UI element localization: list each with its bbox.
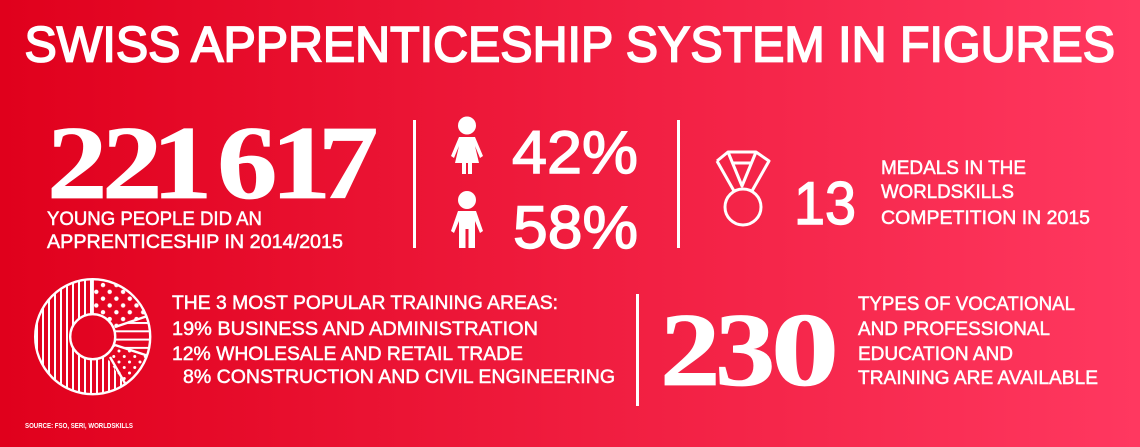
stat: types of education: TRAINING ARE AVAILABLE [858, 367, 1098, 389]
education caption: TYPES OF VOCATIONAL [858, 293, 1075, 315]
donut chart: training areas [34, 278, 152, 396]
medal count: 13 [794, 170, 856, 237]
stat: types of education: AND PROFESSIONAL [858, 318, 1050, 340]
icon: male [451, 191, 483, 248]
stat: medals: WORLDSKILLS [881, 181, 1014, 203]
stat: medals: COMPETITION IN 2015 [881, 207, 1090, 229]
title: SWISS APPRENTICESHIP SYSTEM IN FIGURES [24, 16, 1115, 72]
source note: SOURCE: FSO, SERI, WORLDSKILLS [25, 423, 133, 430]
big number 230: 0 [771, 292, 839, 408]
female percent: 42% [512, 119, 638, 186]
stat: medals [717, 152, 1090, 237]
apprentices caption: YOUNG PEOPLE DID AN [47, 208, 262, 230]
stat: types of education [660, 292, 1098, 408]
stat: types of education: EDUCATION AND [858, 343, 1013, 365]
training areas text: 8% CONSTRUCTION AND CIVIL ENGINEERING [183, 366, 615, 388]
stat: gender split [451, 116, 638, 261]
icon: medal [717, 152, 769, 225]
training areas text: THE 3 MOST POPULAR TRAINING AREAS: [172, 292, 558, 314]
training areas text: 12% WHOLESALE AND RETAIL TRADE [172, 343, 523, 365]
big number 221 617: 221617 [47, 105, 378, 221]
medal caption: MEDALS IN THE [881, 157, 1026, 179]
training areas text [172, 292, 615, 388]
stat: young people: APPRENTICESHIP IN 2014/2015 [47, 231, 343, 253]
big number 230 [660, 292, 839, 408]
male percent: 58% [513, 194, 638, 261]
stat: young people [47, 105, 378, 253]
big number 230: 23 [660, 292, 775, 408]
icon: female [451, 116, 483, 174]
training areas text: 19% BUSINESS AND ADMINISTRATION [172, 318, 538, 340]
